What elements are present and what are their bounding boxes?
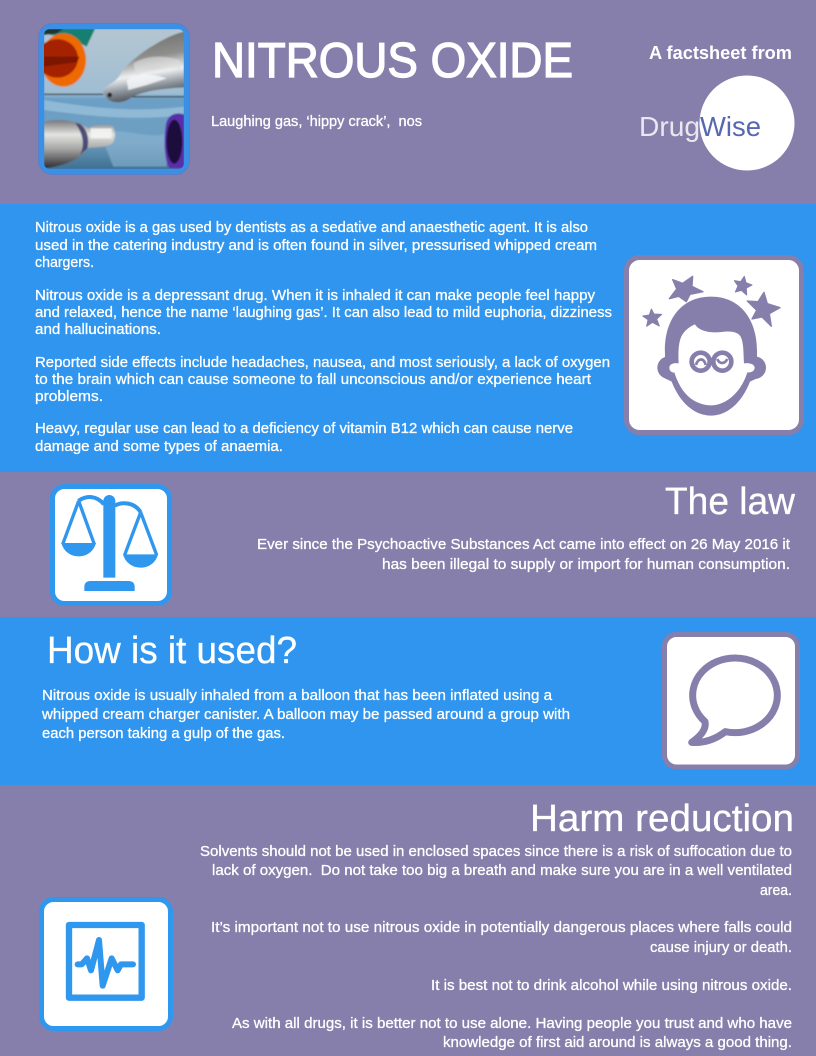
text block: the law: Ever since the Psychoactive Substances Act came into effect on 26 May 2016 it <box>257 536 791 553</box>
text block: introduction: chargers. <box>35 254 94 271</box>
text block: harm reduction: It’s important not to use nitrous oxide in potentially dangerous places where falls could <box>211 919 792 936</box>
text block: introduction: Nitrous oxide is a depressant drug. When it is inhaled it can make people feel happy <box>35 287 595 304</box>
text block: introduction: Nitrous oxide is a gas used by dentists as a sedative and anaesthetic agent. It is also <box>35 219 588 236</box>
band: how is it used background <box>0 617 816 785</box>
heading: Harm reduction: Harm reduction <box>530 798 794 840</box>
text block: introduction: Heavy, regular use can lead to a deficiency of vitamin B12 which can cause nerve <box>35 420 573 437</box>
icon: scales <box>52 486 170 604</box>
text block: introduction: damage and some types of anaemia. <box>35 438 283 455</box>
logo: DrugWise <box>639 76 794 170</box>
text block: introduction: Reported side effects include headaches, nausea, and most seriously, a lack of oxygen <box>35 354 610 371</box>
band: header background <box>0 0 816 204</box>
text block: the law: has been illegal to supply or import for human consumption. <box>382 556 790 573</box>
text block: harm reduction: area. <box>760 882 792 899</box>
heading: How is it used?: How is it used? <box>47 630 297 672</box>
icon: speech bubble <box>664 634 798 767</box>
text block: introduction: and relaxed, hence the name ‘laughing gas’. It can also lead to mild euphoria, dizziness <box>35 304 612 321</box>
text block: harm reduction: knowledge of first aid around is always a good thing. <box>443 1034 792 1051</box>
text block: harm reduction: lack of oxygen. Do not take too big a breath and make sure you are in a well ventilated <box>212 862 792 879</box>
title: NITROUS OXIDE <box>212 34 573 88</box>
band: harm reduction background <box>0 785 816 1056</box>
subtitle: other names: Laughing gas, ‘hippy crack’, nos <box>211 113 422 130</box>
text block: introduction: to the brain which can cause someone to fall unconscious and/or experience heart <box>35 371 592 388</box>
text block: introduction: problems. <box>35 388 103 405</box>
text block: how is it used <box>41 687 570 742</box>
logo: DrugWise: Drug <box>639 111 700 142</box>
photo: whipped cream chargers and balloons <box>37 24 189 174</box>
band: the law background <box>0 472 816 617</box>
text block: harm reduction: It is best not to drink alcohol while using nitrous oxide. <box>431 977 792 994</box>
logo: DrugWise: Wise <box>700 111 761 142</box>
text block: harm reduction: As with all drugs, it is better not to use alone. Having people you trust and who have <box>232 1015 792 1032</box>
icon: heartbeat monitor <box>42 900 170 1028</box>
text block: introduction <box>35 219 612 455</box>
text block: how is it used: Nitrous oxide is usually inhaled from a balloon that has been inflated using a <box>42 687 553 704</box>
factsheet credit: A factsheet from <box>649 43 792 63</box>
text block: harm reduction: cause injury or death. <box>650 939 792 956</box>
text block: harm reduction: Solvents should not be used in enclosed spaces since there is a risk of suffocation due to <box>200 843 792 860</box>
text block: how is it used: whipped cream charger canister. A balloon may be passed around a group with <box>41 706 570 723</box>
text block: how is it used: each person taking a gulp of the gas. <box>42 725 285 742</box>
text block: introduction: and hallucinations. <box>35 321 161 338</box>
band: introduction background <box>0 204 816 472</box>
text block: introduction: used in the catering industry and is often found in silver, pressurised whipped cream <box>35 237 597 254</box>
icon: dizzy face <box>626 258 802 432</box>
text block: the law <box>257 536 791 573</box>
text block: harm reduction <box>200 843 792 1051</box>
heading: The law: The law <box>665 481 796 523</box>
